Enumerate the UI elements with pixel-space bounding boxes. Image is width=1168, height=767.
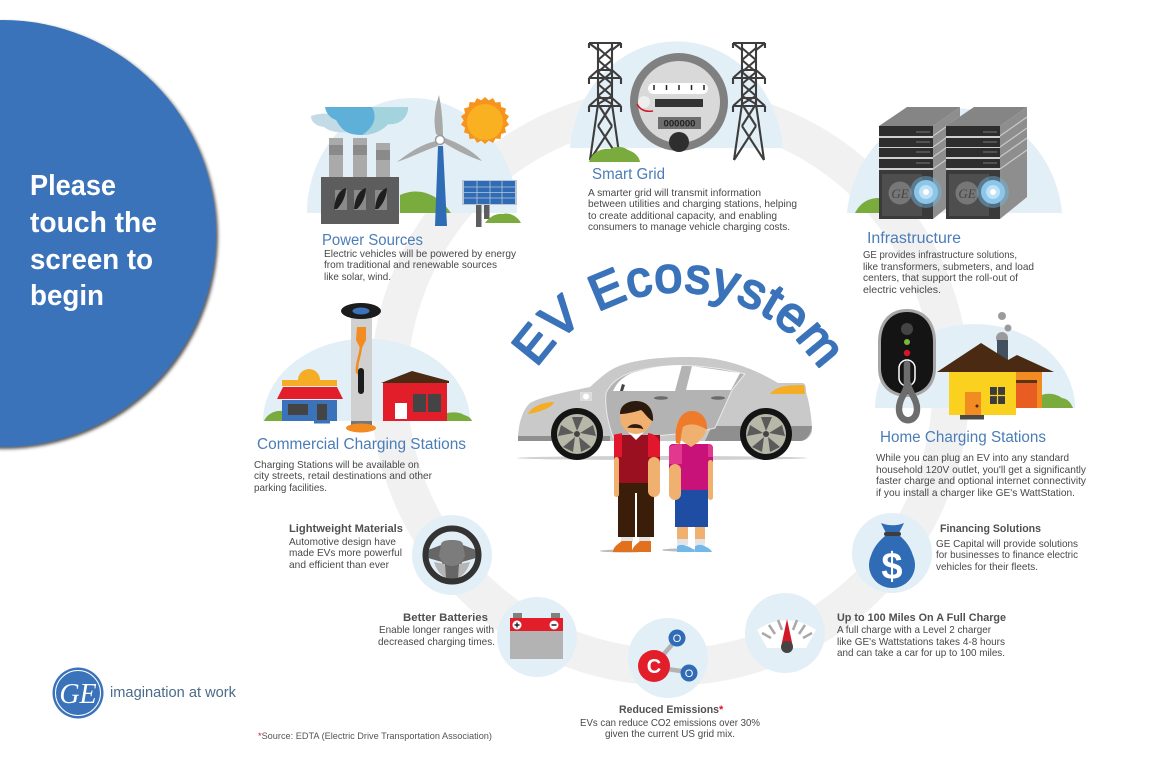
text: infrastructure description [863, 249, 1034, 296]
text: smart grid description: to create additional capacity, and enabling [588, 210, 777, 222]
text: smart grid description: between utilities and charging stations, helping [588, 198, 797, 210]
text: better batteries: Enable longer ranges with [379, 624, 494, 636]
text: power sources description [324, 248, 517, 283]
panel: home charging stations [875, 309, 1087, 499]
illustration: factory, turbine, sun and solar panel [307, 95, 521, 227]
text: financing solutions [936, 523, 1078, 573]
icon: CO2 molecule: C [647, 656, 661, 678]
text: financing solutions: GE Capital will provide solutions [936, 538, 1078, 550]
text: power sources description: like solar, wind. [324, 271, 391, 283]
icon: steering wheel [412, 515, 492, 595]
text: home charging description: While you can plug an EV into any standard [876, 452, 1069, 464]
background ring [389, 105, 951, 667]
text: commercial charging description: city streets, retail destinations and other [254, 470, 432, 482]
icon: money bag [852, 513, 932, 593]
logo: GE imagination at work: imagination at work [110, 684, 236, 701]
illustration: meter and pylons [570, 41, 783, 162]
item: better batteries [378, 597, 577, 677]
text: commercial charging description: parking facilities. [254, 482, 327, 494]
text: better batteries: decreased charging times. [378, 636, 495, 648]
illustration: electric car [517, 357, 812, 460]
text: home charging description: household 120V outlet, you'll get a significantly [876, 464, 1087, 476]
text: infrastructure description: centers, that support the roll-out of [863, 272, 1018, 284]
illustration: man [600, 401, 660, 552]
text: lightweight materials [289, 523, 403, 571]
text: lightweight materials: Lightweight Materials [289, 523, 403, 535]
text: reduced emissions: * [719, 704, 724, 716]
text: power sources description: Electric vehicles will be powered by energy [324, 248, 517, 260]
text: up to 100 miles: Up to 100 Miles On A Full Charge [837, 612, 1006, 624]
start panel: touch the screen: Please [30, 170, 116, 202]
illustration: transformer racks [847, 107, 1062, 219]
text: smart grid description: consumers to manage vehicle charging costs. [588, 221, 790, 233]
illustration: wall charger and house [875, 309, 1075, 420]
item: reduced emissions [580, 618, 760, 740]
panel: commercial charging stations [254, 303, 472, 494]
text: infrastructure description: electric vehicles. [863, 284, 941, 296]
illustration: woman [662, 411, 713, 552]
heading: Home Charging Stations: Home Charging Stations [880, 429, 1046, 446]
text: smart grid description: A smarter grid will transmit information [588, 187, 761, 199]
text: up to 100 miles: A full charge with a Level 2 charger [837, 624, 991, 636]
item: financing solutions [852, 513, 1078, 593]
text: reduced emissions [580, 704, 760, 740]
illustration: charging post and shops [263, 303, 472, 432]
logo: GE imagination at work [52, 668, 236, 718]
heading: Infrastructure: Infrastructure [867, 230, 961, 247]
text: better batteries [378, 612, 495, 648]
item: lightweight materials [289, 515, 492, 595]
text: better batteries: Better Batteries [403, 612, 488, 624]
text: lightweight materials: Automotive design have [289, 536, 396, 548]
start panel: touch the screen: begin [30, 280, 104, 312]
start panel: touch the screen [0, 20, 216, 447]
text: reduced emissions: Reduced Emissions [619, 704, 719, 716]
panel: power sources [307, 95, 521, 283]
source note: *Source: EDTA (Electric Drive Transportation Association) [258, 731, 492, 742]
text: lightweight materials: and efficient than ever [289, 559, 389, 571]
icon: CO2 molecule: O [685, 668, 694, 680]
title: EV Ecosystem: EV Ecosystem [510, 264, 838, 368]
icon: money bag: $ [881, 546, 903, 588]
text: home charging description: if you install a charger like GE's WattStation. [876, 487, 1075, 499]
illustration: meter and pylons: 000000 [664, 118, 696, 128]
text: power sources description: from traditional and renewable sources [324, 259, 497, 271]
text: home charging description: faster charge and optional internet connectivity [876, 475, 1087, 487]
text: up to 100 miles [837, 612, 1006, 659]
panel: smart grid [570, 41, 797, 233]
heading: Smart Grid: Smart Grid [592, 166, 665, 183]
text: smart grid description [588, 187, 797, 233]
text: up to 100 miles: and can take a car for up to 100 miles. [837, 647, 1005, 659]
text: financing solutions: Financing Solutions [940, 523, 1041, 535]
text: up to 100 miles: like GE's Wattstations takes 4-8 hours [837, 636, 1005, 648]
start panel: touch the screen: touch the [30, 207, 157, 239]
text: reduced emissions: EVs can reduce CO2 emissions over 30% [580, 717, 760, 729]
text: commercial charging description: Charging Stations will be available on [254, 459, 419, 471]
icon: battery [497, 597, 577, 677]
text: infrastructure description: like transformers, submeters, and load [863, 261, 1034, 273]
item: up to 100 miles [745, 593, 1006, 673]
text: lightweight materials: made EVs more powerful [289, 547, 402, 559]
heading: Commercial Charging Stations: Commercial Charging Stations [257, 436, 466, 453]
icon: CO2 molecule: O [673, 633, 682, 645]
icon: gauge [745, 593, 825, 673]
logo: GE imagination at work: GE [59, 679, 97, 710]
text: home charging description [876, 452, 1087, 499]
text: financing solutions: for businesses to finance electric [936, 549, 1078, 561]
heading: Power Sources: Power Sources [322, 232, 423, 249]
start panel: touch the screen: screen to [30, 244, 153, 276]
text: reduced emissions: given the current US grid mix. [605, 728, 735, 740]
text: financing solutions: vehicles for their fleets. [936, 561, 1038, 573]
panel: infrastructure [847, 107, 1062, 296]
text: commercial charging description [254, 459, 432, 494]
icon: CO2 molecule [628, 618, 708, 698]
text: infrastructure description: GE provides infrastructure solutions, [863, 249, 1017, 261]
